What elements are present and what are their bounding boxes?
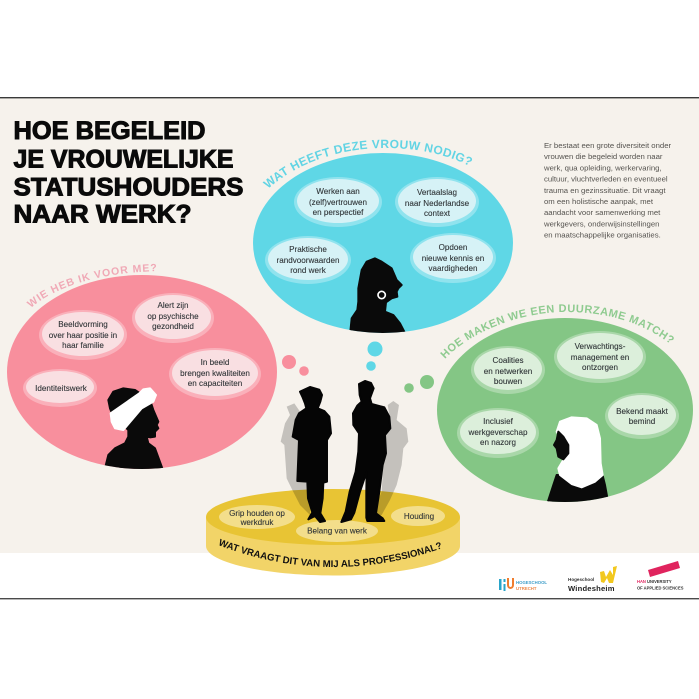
logo: Hogeschool Utrecht (499, 578, 547, 591)
intro paragraph: Er bestaat een grote diversiteit onder (544, 141, 672, 150)
intro paragraph: cultuur, vluchtverleden en eventueel (544, 175, 668, 184)
bubble: inclusief: Inclusief (483, 417, 514, 426)
silhouette: woman with earring (350, 258, 406, 335)
bubble: coalities: Coalities (492, 356, 524, 365)
platform option: grip houden: Grip houden op (229, 509, 285, 518)
panel: hoe maken we een duurzame match (green) (437, 304, 693, 502)
infographic (0, 97, 699, 600)
bubble: vertaalslag: Vertaalslag (417, 188, 457, 197)
bubble: identiteitswerk: Identiteitswerk (35, 384, 88, 393)
bubble: opdoen: Opdoen (439, 243, 467, 252)
bubble: verwachtingsmanagement (554, 331, 646, 383)
intro paragraph (543, 141, 672, 240)
platform option: houding: Houding (404, 512, 434, 521)
intro paragraph: om een holistische aanpak, met (544, 197, 654, 206)
bubble: beeldvorming (39, 310, 127, 360)
bubble: coalities (471, 346, 545, 394)
title: STATUSHOUDERS (14, 174, 244, 202)
logo: HAN: OF APPLIED SCIENCES (637, 586, 684, 590)
bubble: opdoen: vaardigheden (428, 264, 478, 273)
intro paragraph: werk, qua opleiding, werkervaring, (543, 163, 662, 172)
silhouette: male professional (341, 381, 390, 522)
bubble: bekend maakt bemind (605, 393, 679, 439)
bubble: bekend maakt bemind: Bekend maakt (616, 407, 669, 416)
silhouette: woman with hijab (547, 417, 608, 503)
bubble: identiteitswerk (23, 369, 97, 407)
title: JE VROUWELIJKE (14, 146, 234, 174)
pink heading: WIE HEB IK VOOR ME? (26, 264, 156, 307)
bubble: praktische: randvoorwaarden (276, 256, 340, 265)
bubble: in beeld: en capaciteiten (188, 379, 242, 388)
bubble: werken aan: (zelf)vertrouwen (309, 198, 367, 207)
platform side (206, 517, 460, 576)
bubble: werken aan (294, 177, 382, 227)
pink ellipse (7, 275, 277, 469)
thought dots: green (404, 375, 434, 393)
bubble: alert: op psychische (147, 312, 199, 321)
logo: Windesheim: Hogeschool (568, 577, 594, 582)
bubble: coalities: bouwen (494, 377, 522, 386)
green heading: HOE MAKEN WE EEN DUURZAME MATCH? (440, 304, 674, 358)
bubble: werken aan: Werken aan (316, 187, 360, 196)
bubble: inclusief: werkgeverschap (468, 428, 528, 437)
silhouette: woman with headband (105, 388, 162, 468)
logo: Hogeschool Utrecht: HOGESCHOOL (516, 580, 547, 585)
footer logos (499, 561, 684, 593)
cyan heading: WAT HEEFT DEZE VROUW NODIG? (262, 140, 472, 188)
platform heading: WAT VRAAGT DIT VAN MIJ ALS PROFESSIONAL? (220, 538, 441, 568)
thought dots: pink (282, 355, 309, 376)
bubble: in beeld: brengen kwaliteiten (180, 369, 250, 378)
thought dots: cyan (366, 342, 382, 371)
cyan ellipse (253, 153, 513, 333)
title (14, 117, 244, 228)
bubble: alert (132, 293, 214, 343)
intro paragraph: aandacht voor samenwerking met (544, 208, 661, 217)
panel: wie heb ik voor me (pink) (7, 264, 277, 469)
bubble: opdoen: nieuwe kennis en (422, 254, 484, 263)
poster background (0, 98, 699, 553)
bubble: bekend maakt bemind: bemind (629, 417, 655, 426)
bubble: verwachtingsmanagement: Verwachtings- (575, 342, 626, 351)
bubble: alert: gezondheid (152, 322, 194, 331)
intro paragraph: vrouwen die begeleid worden naar (544, 152, 663, 161)
bubble: coalities: en netwerken (484, 367, 532, 376)
title: NAAR WERK? (14, 200, 192, 228)
bubble: inclusief: en nazorg (480, 438, 516, 447)
shadow: woman (281, 403, 312, 515)
bubble: in beeld (169, 348, 261, 400)
intro paragraph: trauma en gezinssituatie. Dit vraagt (544, 186, 666, 195)
intro paragraph: en maatschappelijke organisaties. (544, 231, 661, 240)
platform option: belang van werk (296, 520, 378, 542)
shadow: man (367, 401, 408, 518)
bubble: praktische: Praktische (289, 245, 327, 254)
bubble: verwachtingsmanagement: ontzorgen (582, 363, 618, 372)
logo: Windesheim: Windesheim (568, 584, 615, 593)
logo: Windesheim (568, 566, 617, 593)
bubble: inclusief (457, 408, 539, 458)
platform option: houding (391, 506, 445, 526)
bubble: werken aan: en perspectief (313, 208, 364, 217)
bubble: beeldvorming: haar familie (62, 341, 104, 350)
bubble: opdoen (410, 233, 496, 283)
bubble: vertaalslag: naar Nederlandse (405, 199, 470, 208)
platform (206, 489, 460, 576)
professionals (281, 381, 408, 522)
platform option: grip houden: werkdruk (240, 518, 274, 527)
panel: wat heeft deze vrouw nodig (cyan) (253, 140, 513, 333)
bubble: in beeld: In beeld (201, 358, 229, 367)
bubble: praktische: rond werk (290, 266, 327, 275)
bubble: verwachtingsmanagement: management en (571, 353, 629, 362)
logo: Hogeschool Utrecht: UTRECHT (516, 586, 537, 591)
title: HOE BEGELEID (14, 117, 206, 145)
platform option: belang van werk: Belang van werk (307, 526, 368, 536)
green ellipse (437, 318, 693, 502)
platform option: grip houden (219, 505, 295, 529)
bubble: praktische (265, 236, 351, 284)
logo: HAN: HAN UNIVERSITY (637, 579, 672, 584)
bubble: vertaalslag: context (424, 209, 451, 218)
bubble: vertaalslag (395, 177, 479, 227)
intro paragraph: werkgevers, onderwijsinstellingen (543, 219, 659, 228)
platform top (206, 489, 460, 545)
bubble: beeldvorming: over haar positie in (49, 331, 117, 340)
logo: HAN (637, 561, 684, 590)
bubble: beeldvorming: Beeldvorming (58, 320, 108, 329)
bubble: alert: Alert zijn (157, 301, 189, 310)
silhouette: female professional (293, 387, 331, 522)
